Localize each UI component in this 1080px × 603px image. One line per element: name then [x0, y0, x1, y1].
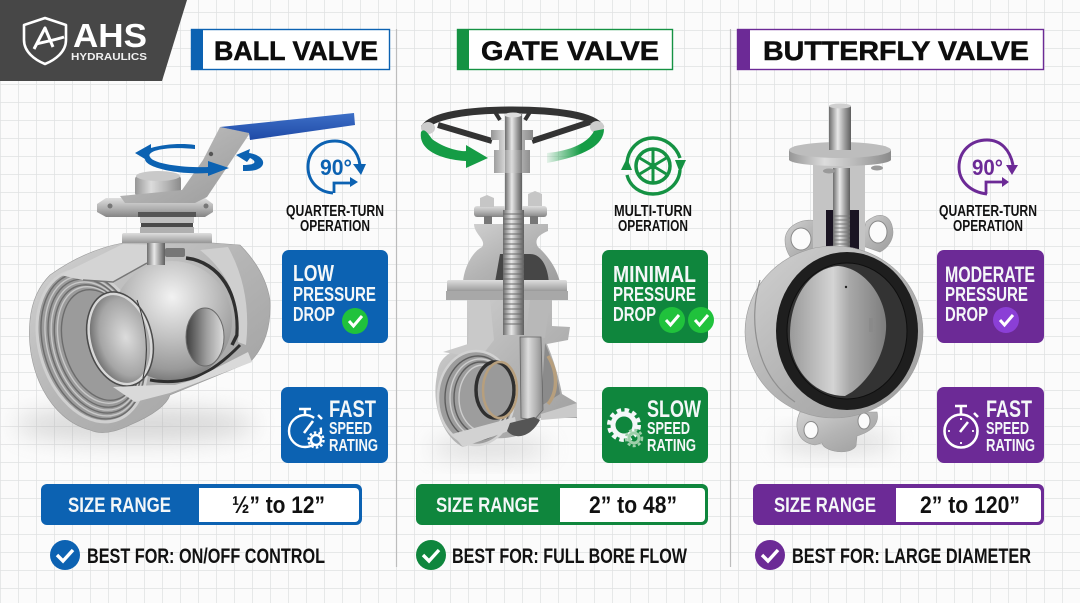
card: speed rating: FAST [986, 396, 1032, 423]
label: operation: QUARTER-TURN [286, 203, 384, 220]
best for [50, 540, 325, 570]
arrow: handle rotation [135, 144, 263, 176]
threaded port [18, 256, 166, 436]
disc [790, 266, 886, 396]
label: operation: OPERATION [953, 218, 1023, 235]
size range bar [416, 484, 708, 525]
card: pressure drop: DROP [945, 304, 988, 326]
illustration: butterfly valve [745, 104, 923, 452]
card: pressure drop [937, 250, 1044, 343]
heading: butterfly valve: BUTTERFLY VALVE [763, 36, 1029, 66]
valve handle [120, 113, 355, 203]
label: operation [286, 203, 384, 235]
size range bar: SIZE RANGE [436, 494, 539, 517]
icon: stopwatch and gear [289, 409, 324, 448]
label: operation [939, 203, 1037, 235]
card: pressure drop: PRESSURE [293, 284, 376, 306]
card: speed rating [937, 387, 1044, 463]
card: pressure drop: MODERATE [945, 262, 1035, 287]
card: pressure drop: PRESSURE [945, 284, 1028, 306]
upper lugs [785, 215, 893, 262]
card: pressure drop: DROP [293, 304, 335, 326]
arrow: wheel rotation [421, 129, 604, 168]
cut wall sections [113, 352, 252, 402]
card: pressure drop [282, 250, 388, 343]
card: speed rating: FAST [329, 396, 376, 423]
body ring [745, 246, 923, 418]
icon: multi-turn wheel [621, 138, 686, 194]
illustration: ball valve cutaway [15, 113, 355, 443]
illustration: gate valve cutaway [421, 110, 604, 458]
heading: ball valve: BALL VALVE [214, 36, 378, 66]
ball [112, 261, 232, 381]
rubber seat [776, 252, 918, 410]
best for [755, 540, 1031, 570]
label: operation: OPERATION [300, 218, 370, 235]
heading: butterfly valve [737, 29, 1044, 70]
icon: gears [609, 410, 642, 446]
valve body [29, 243, 270, 433]
label: operation: MULTI-TURN [614, 203, 692, 220]
best for: BEST FOR: FULL BORE FLOW [452, 545, 687, 568]
icon: stopwatch [944, 406, 978, 448]
size range bar [41, 484, 362, 525]
heading: ball valve [191, 29, 390, 70]
panel: butterfly valve [737, 29, 1044, 570]
best for [416, 540, 687, 570]
gate body [435, 280, 577, 447]
card: speed rating [602, 387, 708, 463]
wedge gate [520, 337, 543, 420]
heading: gate valve [457, 29, 672, 70]
panel: ball valve [15, 29, 390, 570]
yoke and bolts [463, 130, 560, 288]
card: pressure drop: LOW [293, 260, 334, 286]
panel: gate valve [416, 29, 714, 570]
size range bar: SIZE RANGE [774, 494, 876, 517]
card: speed rating: RATING [647, 435, 696, 455]
logo subtitle: HYDRAULICS [71, 51, 147, 63]
lower lugs [797, 412, 878, 452]
card: speed rating: SLOW [647, 396, 701, 423]
best for: BEST FOR: ON/OFF CONTROL [87, 545, 325, 568]
card: pressure drop: MINIMAL [613, 261, 696, 287]
icon: 90 degree turn [959, 140, 1018, 194]
seat inner [787, 263, 907, 399]
card: pressure drop: DROP [613, 304, 656, 326]
icon: 90 degree turn: 90° [320, 155, 352, 180]
card: speed rating: RATING [329, 435, 378, 455]
valve bonnet [97, 171, 213, 245]
icon: shield [24, 18, 66, 64]
card: pressure drop: PRESSURE [613, 284, 696, 306]
card: pressure drop [602, 250, 714, 343]
card: speed rating [281, 387, 388, 463]
icon: 90 degree turn [308, 141, 366, 193]
heading: gate valve: GATE VALVE [481, 36, 659, 66]
size range bar: 2” to 120” [920, 492, 1020, 519]
seat ring [186, 258, 237, 345]
handwheel [421, 110, 604, 141]
card: speed rating: SPEED [329, 418, 372, 438]
top flange and shaft [789, 104, 891, 174]
logo: AHS Hydraulics [0, 0, 187, 81]
logo wordmark: AHS [73, 17, 147, 54]
label: operation: QUARTER-TURN [939, 203, 1037, 220]
label: operation: OPERATION [618, 218, 688, 235]
size range bar: SIZE RANGE [68, 494, 171, 517]
neck [813, 165, 865, 258]
stem [494, 112, 530, 335]
size range bar [753, 484, 1044, 525]
card: speed rating: RATING [986, 435, 1035, 455]
label: operation [614, 203, 692, 235]
size range bar: 2” to 48” [589, 492, 677, 519]
card: speed rating: SPEED [986, 418, 1029, 438]
threaded port [438, 351, 556, 445]
icon: 90 degree turn: 90° [972, 155, 1003, 180]
size range bar: ½” to 12” [232, 492, 325, 519]
bore [79, 287, 161, 391]
card: speed rating: SPEED [647, 418, 690, 438]
